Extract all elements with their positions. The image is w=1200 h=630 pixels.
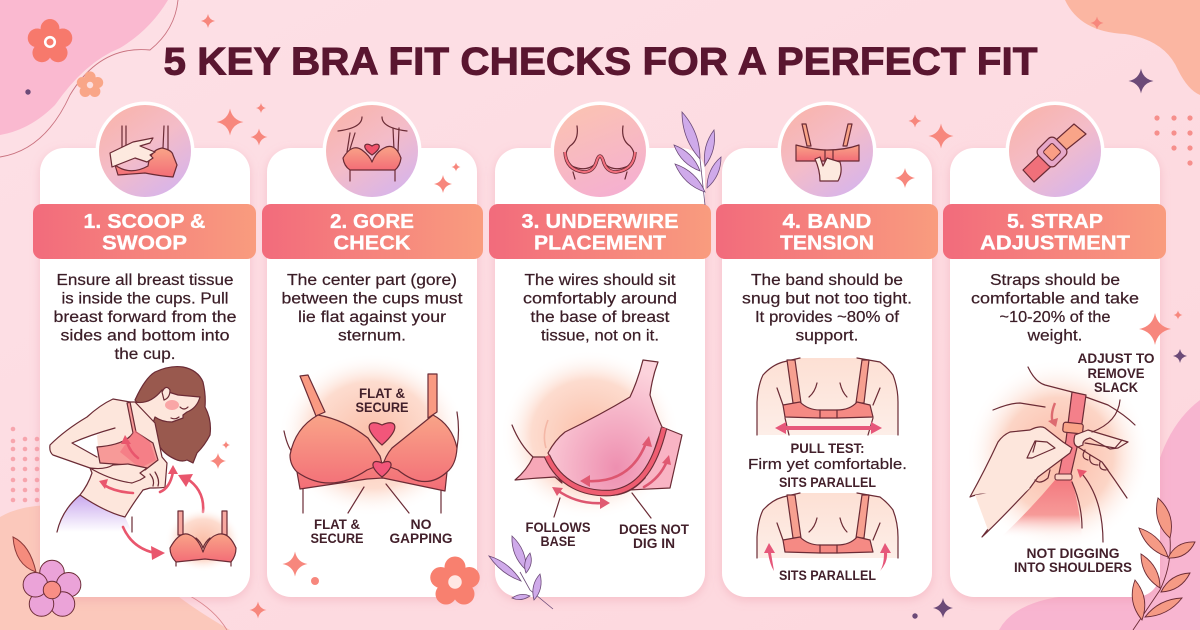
pull test text: SITS PARALLEL	[779, 475, 876, 490]
description 3: tissue, not on it.	[541, 328, 659, 344]
heading bar 4: 4. BAND	[782, 210, 872, 233]
illustration: underwire side view: BASE	[540, 534, 576, 549]
description 5: weight.	[1026, 328, 1082, 344]
heading bar 5	[943, 204, 1166, 259]
illustration: woman scooping	[50, 367, 241, 572]
hand	[90, 464, 147, 483]
description 3: comfortably around	[523, 290, 677, 308]
description 4	[742, 272, 912, 344]
pull test text	[748, 440, 907, 490]
description 1: the cup.	[114, 346, 176, 363]
flower: lilac bottom left	[23, 560, 81, 616]
face and neck	[135, 390, 200, 423]
heading bar 2: 2. GORE	[330, 210, 414, 233]
illustration: hands adjusting strap: REMOVE	[1088, 366, 1144, 381]
card 4	[722, 148, 932, 597]
description 1: sides and bottom into	[60, 328, 230, 344]
pull test text: PULL TEST:	[790, 440, 864, 456]
illustration: underwire side view: DOES NOT	[619, 522, 690, 537]
heading bar 1: SWOOP	[102, 232, 187, 254]
icon: strap slider	[1006, 102, 1104, 200]
description 1	[54, 272, 237, 363]
panel: 5 strap adjustment	[943, 102, 1166, 597]
strap	[1058, 392, 1086, 478]
illustration: bra gore: GAPPING	[390, 531, 452, 546]
panel: 2 gore check	[262, 102, 483, 597]
small bra	[165, 508, 241, 572]
flower: peach small	[77, 71, 103, 97]
description 4: It provides ~80% of	[755, 309, 900, 326]
illustration: bra gore: SECURE	[356, 400, 408, 415]
description 4: snug but not too tight.	[742, 290, 912, 308]
sparkle card 4	[895, 168, 915, 188]
heading bar 1	[33, 204, 256, 259]
illustration: bra gore	[278, 353, 466, 546]
heading bar 2: CHECK	[334, 232, 411, 254]
illustration: bra gore: FLAT &	[359, 386, 405, 401]
dots: right	[1154, 115, 1193, 166]
illustration: hands adjusting strap	[966, 351, 1154, 575]
description 2: The center part (gore)	[287, 272, 457, 289]
bra on torso	[97, 402, 158, 470]
description 3: The wires should sit	[524, 272, 676, 289]
hair	[135, 367, 210, 463]
dots: left	[11, 427, 39, 502]
description 1: is inside the cups. Pull	[62, 290, 228, 308]
branch: coral bottom right	[1132, 498, 1195, 630]
heading bar 5: ADJUSTMENT	[980, 232, 1131, 254]
sparkles near woman	[210, 441, 230, 469]
illustration: underwire side view: FOLLOWS	[526, 520, 590, 535]
description 1: breast forward from the	[54, 309, 237, 326]
arrows	[1052, 403, 1055, 423]
sparkles card 2	[282, 162, 460, 585]
icon: underwire	[550, 102, 650, 200]
bra strap lines	[1072, 400, 1120, 528]
heading bar 3: 3. UNDERWIRE	[522, 210, 678, 233]
illustration: back view bottom	[757, 493, 898, 583]
icon: gore heart	[322, 102, 422, 200]
panel: 3 underwire placement	[489, 102, 711, 597]
heading bar 1: 1. SCOOP &	[84, 210, 206, 233]
leggings	[57, 495, 132, 532]
illustration: hands adjusting strap: INTO SHOULDERS	[1014, 560, 1132, 575]
pull test text: Firm yet comfortable.	[748, 456, 907, 473]
sparkles	[201, 14, 1182, 618]
illustration: back view top	[757, 358, 898, 435]
arrows	[104, 442, 203, 553]
panel: 1 scoop and swoop	[33, 102, 256, 597]
title: 5 KEY BRA FIT CHECKS FOR A PERFECT FIT	[164, 40, 1038, 84]
card 3	[495, 148, 705, 597]
description 2	[282, 272, 463, 344]
card 2	[267, 148, 477, 597]
illustration: hands adjusting strap: ADJUST TO	[1078, 351, 1154, 366]
description 4: The band should be	[751, 272, 903, 289]
icon: hand scooping breast into bra	[96, 102, 194, 200]
heading bar 2	[262, 204, 483, 259]
branch: lilac bottom	[489, 536, 553, 609]
illustration: hands adjusting strap: SLACK	[1094, 380, 1138, 395]
heading bar 5: 5. STRAP	[1007, 210, 1103, 233]
heading bar 4: TENSION	[780, 232, 874, 254]
description 5: Straps should be	[990, 272, 1120, 289]
heading bar 3	[489, 204, 711, 259]
description 2: sternum.	[338, 328, 406, 344]
illustration: back view bottom: SITS PARALLEL	[779, 568, 876, 583]
description 4: support.	[796, 328, 858, 344]
branch: lilac top	[674, 112, 721, 205]
sparkle: over card 5 edge	[1139, 313, 1171, 345]
heading bar 3: PLACEMENT	[534, 232, 666, 254]
card 1	[40, 148, 250, 597]
icon: band pull	[778, 102, 876, 200]
description 2: lie flat against your	[298, 309, 446, 326]
illustration: bra gore: SECURE	[310, 531, 364, 546]
flower: coral top left	[28, 19, 72, 62]
arrows along wire	[557, 443, 667, 503]
illustration: bra gore: FLAT &	[314, 517, 360, 532]
description 3: the base of breast	[530, 309, 670, 326]
heart: gore	[373, 461, 391, 477]
illustration: underwire side view: DIG IN	[633, 536, 675, 551]
description 5: comfortable and take	[971, 290, 1139, 308]
illustration: underwire side view	[500, 350, 690, 551]
leaf: coral left	[13, 537, 36, 572]
illustration: hands adjusting strap: NOT DIGGING	[1026, 546, 1120, 561]
heading bar 4	[716, 204, 938, 259]
heart: top	[369, 423, 395, 445]
illustration: bra gore: NO	[410, 517, 432, 532]
flower: coral bottom	[430, 556, 480, 604]
torso and arm	[50, 399, 167, 517]
card 5	[950, 148, 1160, 597]
panel: 4 band tension	[716, 102, 938, 597]
description 5	[971, 272, 1139, 344]
description 5: ~10-20% of the	[1000, 309, 1110, 326]
description 3	[523, 272, 677, 344]
description 1: Ensure all breast tissue	[56, 272, 234, 289]
right hand	[1074, 430, 1128, 449]
left hand	[970, 427, 1072, 537]
description 2: between the cups must	[282, 290, 463, 308]
